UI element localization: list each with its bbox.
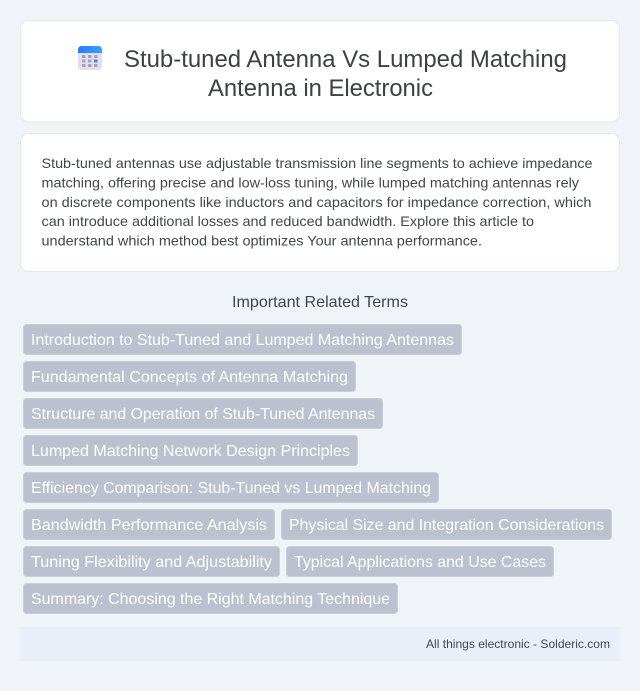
chip: summary: [24, 584, 398, 614]
chip: lumped matching design: [24, 436, 358, 466]
chip: structure and operation: [24, 398, 382, 428]
intro paragraph: Stub-tuned antennas use adjustable transmission line segments to achieve impedance: [42, 155, 593, 171]
intro paragraph: on discrete components like inductors and capacitors for impedance correction, which: [42, 194, 592, 210]
chip: structure and operation: Structure and Operation of Stub-Tuned Antennas: [31, 406, 375, 423]
chip: bandwidth performance: Bandwidth Performance Analysis: [31, 517, 267, 534]
chip: tuning flexibility: Tuning Flexibility and Adjustability: [31, 554, 272, 571]
title: [124, 46, 567, 102]
chip: efficiency comparison: Efficiency Comparison: Stub-Tuned vs Lumped Matching: [31, 480, 431, 497]
chip: lumped matching design: Lumped Matching Network Design Principles: [31, 443, 350, 460]
chip: fundamental concepts: Fundamental Concepts of Antenna Matching: [31, 369, 348, 386]
chip: summary: Summary: Choosing the Right Matching Technique: [31, 591, 390, 608]
term chips: [24, 324, 612, 614]
chip: physical size: Physical Size and Integration Considerations: [289, 517, 604, 534]
chip: tuning flexibility: [24, 546, 280, 576]
footer credit: All things electronic - Solderic.com: [426, 637, 610, 651]
chip: fundamental concepts: [24, 362, 356, 392]
title: Stub-tuned Antenna Vs Lumped Matching: [124, 46, 567, 73]
heading: important related terms: Important Related Terms: [232, 294, 408, 311]
chip: typical applications: [286, 546, 554, 576]
intro paragraph: matching, offering precise and low-loss tuning, while lumped matching antennas rely: [42, 174, 579, 190]
chip: physical size: [282, 510, 612, 540]
intro paragraph: can introduce additional losses and reduced bandwidth. Explore this article to: [42, 213, 534, 229]
chip: introduction: [24, 324, 462, 354]
chip: typical applications: Typical Applications and Use Cases: [294, 554, 546, 571]
icon: calendar: [78, 46, 102, 70]
title: Antenna in Electronic: [208, 75, 433, 102]
intro paragraph: understand which method best optimizes Your antenna performance.: [42, 232, 482, 248]
panel: intro text: [20, 134, 620, 272]
chip: efficiency comparison: [24, 472, 438, 502]
chip: bandwidth performance: [24, 510, 274, 540]
footer: [20, 627, 620, 661]
intro paragraph: [42, 155, 593, 248]
header panel: [20, 20, 620, 122]
chip: introduction: Introduction to Stub-Tuned and Lumped Matching Antennas: [31, 332, 454, 349]
